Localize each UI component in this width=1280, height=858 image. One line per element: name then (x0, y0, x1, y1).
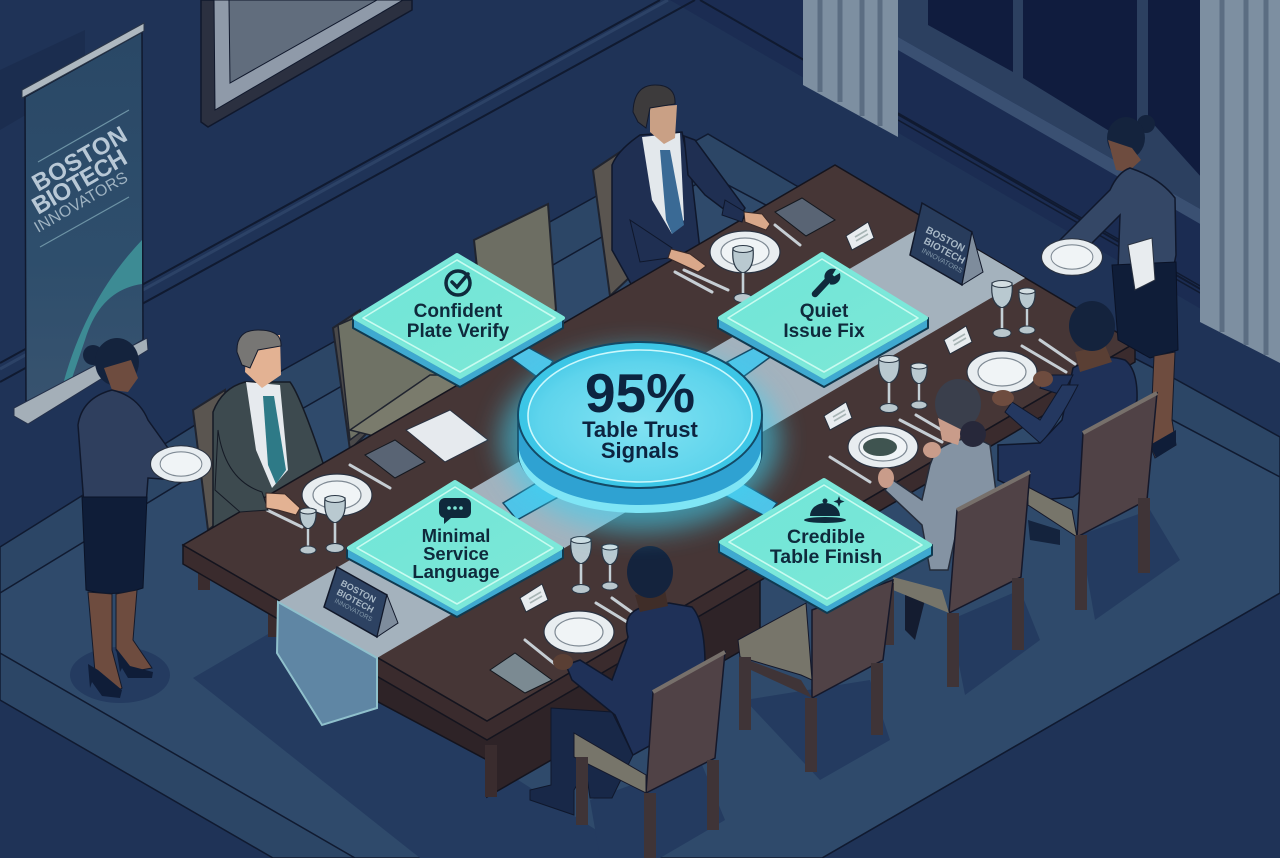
place settings (267, 198, 1075, 693)
wall picture frame (201, 0, 412, 127)
banner: Boston Biotech Innovators (14, 23, 148, 424)
card: Confident Plate Verify: Plate Verify (407, 321, 510, 342)
card: Minimal Service Language: Service (423, 543, 489, 564)
connector bars (503, 343, 777, 520)
floor shadows (70, 510, 1180, 858)
table runner (278, 222, 1025, 658)
window (898, 0, 1202, 294)
banner: Boston Biotech Innovators: BOSTON (28, 121, 132, 197)
chair: right rear (1028, 393, 1157, 610)
table tent sign right: BIOTECH (922, 236, 966, 267)
table tent sign left: INNOVATORS (333, 598, 374, 624)
card: Confident Plate Verify (353, 255, 563, 387)
table tent sign right: INNOVATORS (920, 248, 963, 275)
banner: Boston Biotech Innovators: BIOTECH (28, 144, 132, 220)
hub label: Table Trust (582, 417, 699, 442)
hub label: Signals (601, 438, 679, 463)
curtains (803, 0, 1280, 363)
card: Minimal Service Language: Minimal (422, 525, 490, 546)
hands of far-side diners (215, 200, 770, 515)
person: diner bottom (530, 546, 705, 815)
table (183, 165, 1135, 797)
card: Confident Plate Verify: Confident (414, 301, 503, 322)
table tent sign right (910, 203, 983, 285)
banner: Boston Biotech Innovators: INNOVATORS (32, 169, 131, 236)
table tent sign right: BOSTON (924, 225, 966, 255)
card: Quiet Issue Fix: Issue Fix (783, 321, 865, 342)
icon: cloche (804, 496, 846, 523)
chairs behind table (193, 152, 632, 530)
person: seated top (612, 85, 745, 300)
person: server right (1042, 115, 1178, 458)
central hub (500, 342, 780, 532)
person: server left (78, 338, 211, 698)
person: diner right (992, 301, 1137, 545)
chair: center (738, 580, 893, 772)
person: seated left (213, 330, 323, 540)
card: Quiet Issue Fix: Quiet (800, 301, 849, 322)
table tent sign left: BIOTECH (335, 587, 376, 615)
chair: front (574, 652, 725, 858)
card: Quiet Issue Fix (718, 254, 928, 387)
table tent sign left (324, 567, 398, 637)
icon: speech bubble (439, 498, 471, 524)
card: Credible Table Finish: Table Finish (770, 546, 882, 568)
card: Credible Table Finish: Credible (787, 526, 865, 548)
card: Credible Table Finish (719, 480, 932, 613)
icon: check badge (446, 271, 470, 295)
person: diner center right (878, 379, 997, 640)
hub value: 95% (585, 362, 695, 424)
chair: right middle (888, 472, 1030, 687)
card: Minimal Service Language (347, 482, 563, 617)
icon: wrench (815, 270, 839, 294)
table tent sign left: BOSTON (339, 578, 378, 605)
card: Minimal Service Language: Language (412, 561, 500, 582)
